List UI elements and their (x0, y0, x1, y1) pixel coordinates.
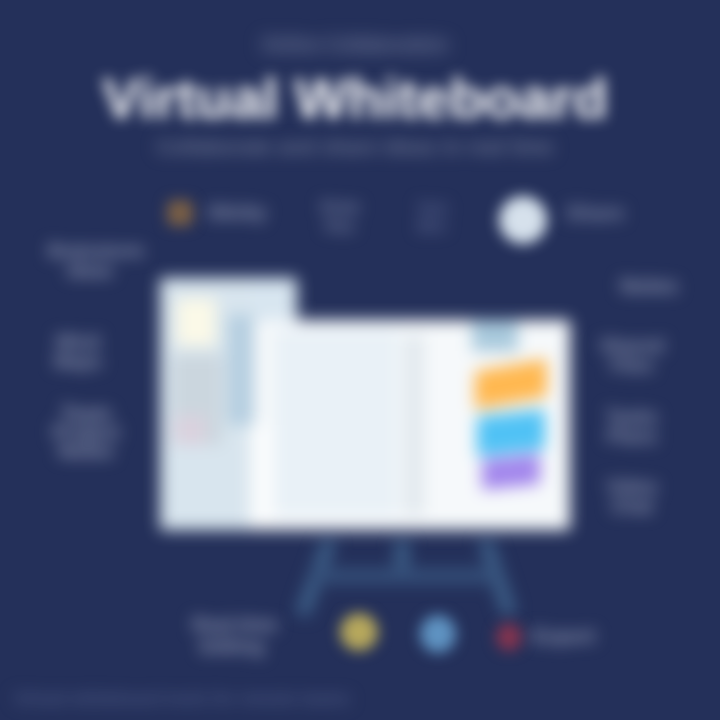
label: right two (596, 332, 669, 380)
label: right four: Chat (611, 497, 653, 518)
label: bottom left: Real-time (192, 615, 278, 636)
icon: white circle (499, 196, 547, 244)
left sidebar (160, 278, 250, 530)
label: tool two: Pen (325, 219, 355, 236)
label: right one: Notes (620, 275, 678, 298)
label: right three (601, 404, 662, 451)
icon: yellow circle (340, 613, 378, 651)
label: right two: Files (610, 356, 654, 377)
label: left one: Ideas (67, 261, 113, 281)
label: right four (602, 473, 662, 521)
sticky: blue (477, 409, 545, 457)
board tab (160, 278, 297, 348)
sidebar cream note (176, 298, 216, 346)
label: right two: Shared (600, 336, 664, 357)
label: left two: Mind (56, 332, 100, 353)
board stand (292, 536, 520, 620)
footer strip: Virtual whiteboard tools for remote teams (14, 689, 350, 708)
sidebar strip (228, 315, 254, 425)
canvas divider (404, 335, 424, 515)
label: tool two: Draw (320, 199, 360, 216)
label: right four: Video (606, 477, 658, 498)
label: tool four: Share (566, 202, 624, 225)
subtitle: Collaborate and share ideas in real time (157, 136, 553, 159)
right labels (596, 272, 682, 521)
left labels (42, 237, 148, 466)
label: tool three (417, 200, 447, 235)
icon: red mark (496, 623, 522, 651)
top tool row (158, 186, 626, 254)
sidebar gray panel (172, 355, 222, 445)
label: tool two (318, 196, 361, 237)
canvas area (274, 330, 398, 515)
bottom row (186, 604, 600, 662)
label: left one: Brainstorm (48, 241, 144, 261)
label: right three: Plans (607, 427, 657, 448)
board body (160, 320, 570, 530)
label: left three (46, 400, 124, 466)
title: Virtual Whiteboard (102, 67, 608, 131)
icon: blue circle (420, 615, 456, 653)
whiteboard (148, 266, 583, 543)
label: tool three: Box (418, 218, 446, 235)
label: bottom left (186, 610, 282, 662)
label: left two (48, 327, 106, 378)
sticky: purple (482, 454, 540, 490)
sidebar pink note (174, 415, 206, 445)
label: bottom right: Export (532, 626, 595, 648)
label: tool three: Text (417, 200, 447, 217)
label: right three: Tasks (606, 407, 658, 428)
stand legs (302, 540, 510, 615)
canvas edge (250, 425, 274, 525)
eyebrow heading: Online Collaboration (262, 35, 448, 56)
label: left two: Maps (54, 352, 102, 373)
label: left three: Project (52, 422, 120, 444)
right column top (472, 321, 518, 351)
label: bottom left: Editing (200, 637, 264, 658)
label: tool one: Sticky (208, 202, 266, 224)
icon: orange tool (167, 200, 193, 226)
label: left three: Team (61, 403, 111, 425)
sticky: orange (475, 359, 547, 409)
label: left one (42, 237, 148, 285)
label: left three: Notes (58, 441, 114, 463)
